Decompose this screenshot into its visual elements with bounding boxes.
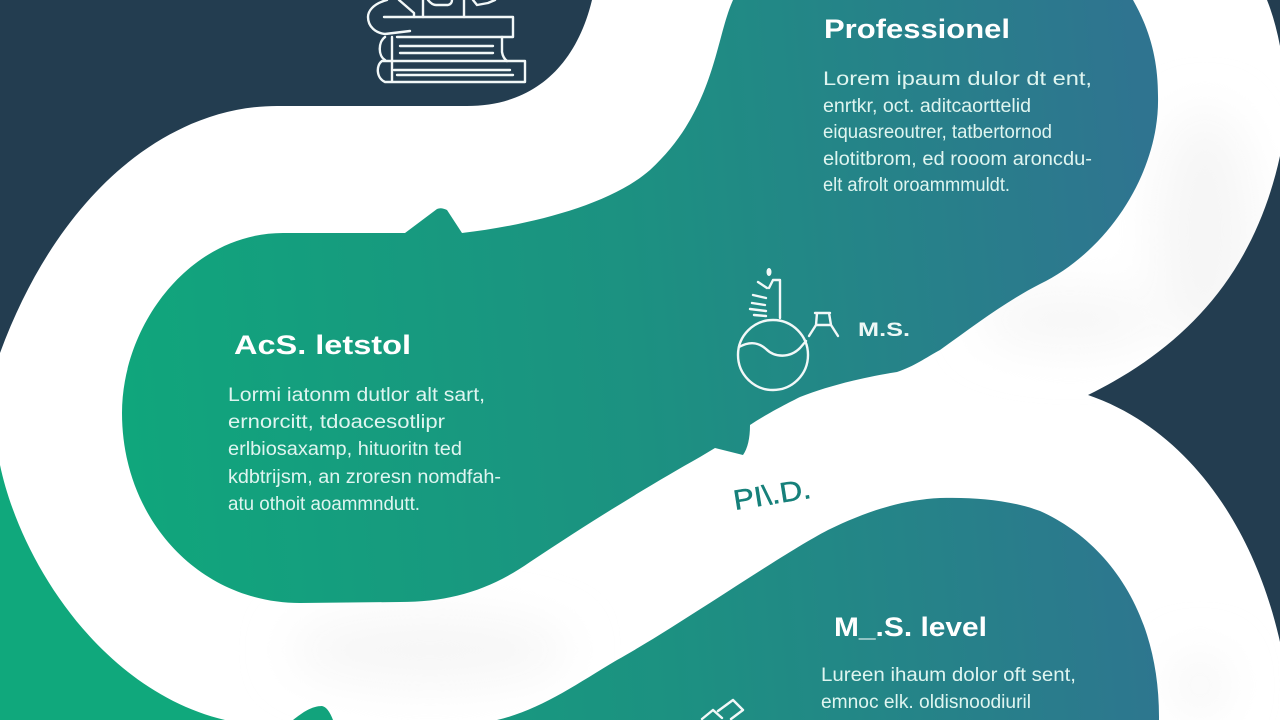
green corner: bottom left xyxy=(0,465,225,720)
text block: AcS. body: kdbtrijsm, an zroresn nomdfah- xyxy=(228,467,501,488)
label: PI.D. on ribbon: PI\.D. xyxy=(731,473,813,516)
text block: AcS. body xyxy=(228,385,501,515)
ribbon soft shadows xyxy=(290,110,1255,715)
icon: pencil xyxy=(702,700,743,719)
label: M.S.: M.S. xyxy=(858,320,910,341)
dark corner: top left xyxy=(0,0,592,353)
text block: Professionel body xyxy=(823,69,1092,196)
text block: AcS. body: atu othoit aoammndutt. xyxy=(228,494,420,515)
text block: Professionel body: elotitbrom, ed rooom aroncdu- xyxy=(823,149,1092,170)
text block: M.S. level body: Lureen ihaum dolor oft sent, xyxy=(821,665,1076,686)
text block: M.S. level body: emnoc elk. oldisnoodiuril xyxy=(821,692,1031,713)
panel: lower gradient band xyxy=(497,498,1159,720)
icon: small stand xyxy=(809,313,838,336)
heading: M.S. level: M_.S. level xyxy=(834,612,987,642)
text block: Professionel body: eiquasreoutrer, tatbertornod xyxy=(823,122,1052,143)
heading: Professionel: Professionel xyxy=(824,14,1010,44)
dark wedge: right xyxy=(1088,156,1280,642)
text block: Professionel body: Lorem ipaum dulor dt ent, xyxy=(823,69,1092,90)
panel: main gradient band xyxy=(122,0,1158,603)
text block: Professionel body: enrtkr, oct. aditcaorttelid xyxy=(823,96,1031,117)
heading: AcS. letstol: AcS. letstol xyxy=(234,330,411,360)
green bump: bottom xyxy=(293,706,333,720)
text block: AcS. body: erlbiosaxamp, hituoritn ted xyxy=(228,439,462,460)
text block: Professionel body: elt afrolt oroammmuldt. xyxy=(823,175,1010,196)
text block: AcS. body: Lormi iatonm dutlor alt sart, xyxy=(228,385,485,406)
text block: M.S. level body xyxy=(821,665,1076,713)
dark corner: top right xyxy=(1267,0,1280,46)
icon: flask xyxy=(738,268,808,390)
icon: stack of books xyxy=(368,0,525,82)
text block: AcS. body: ernorcitt, tdoacesotlipr xyxy=(228,412,446,433)
